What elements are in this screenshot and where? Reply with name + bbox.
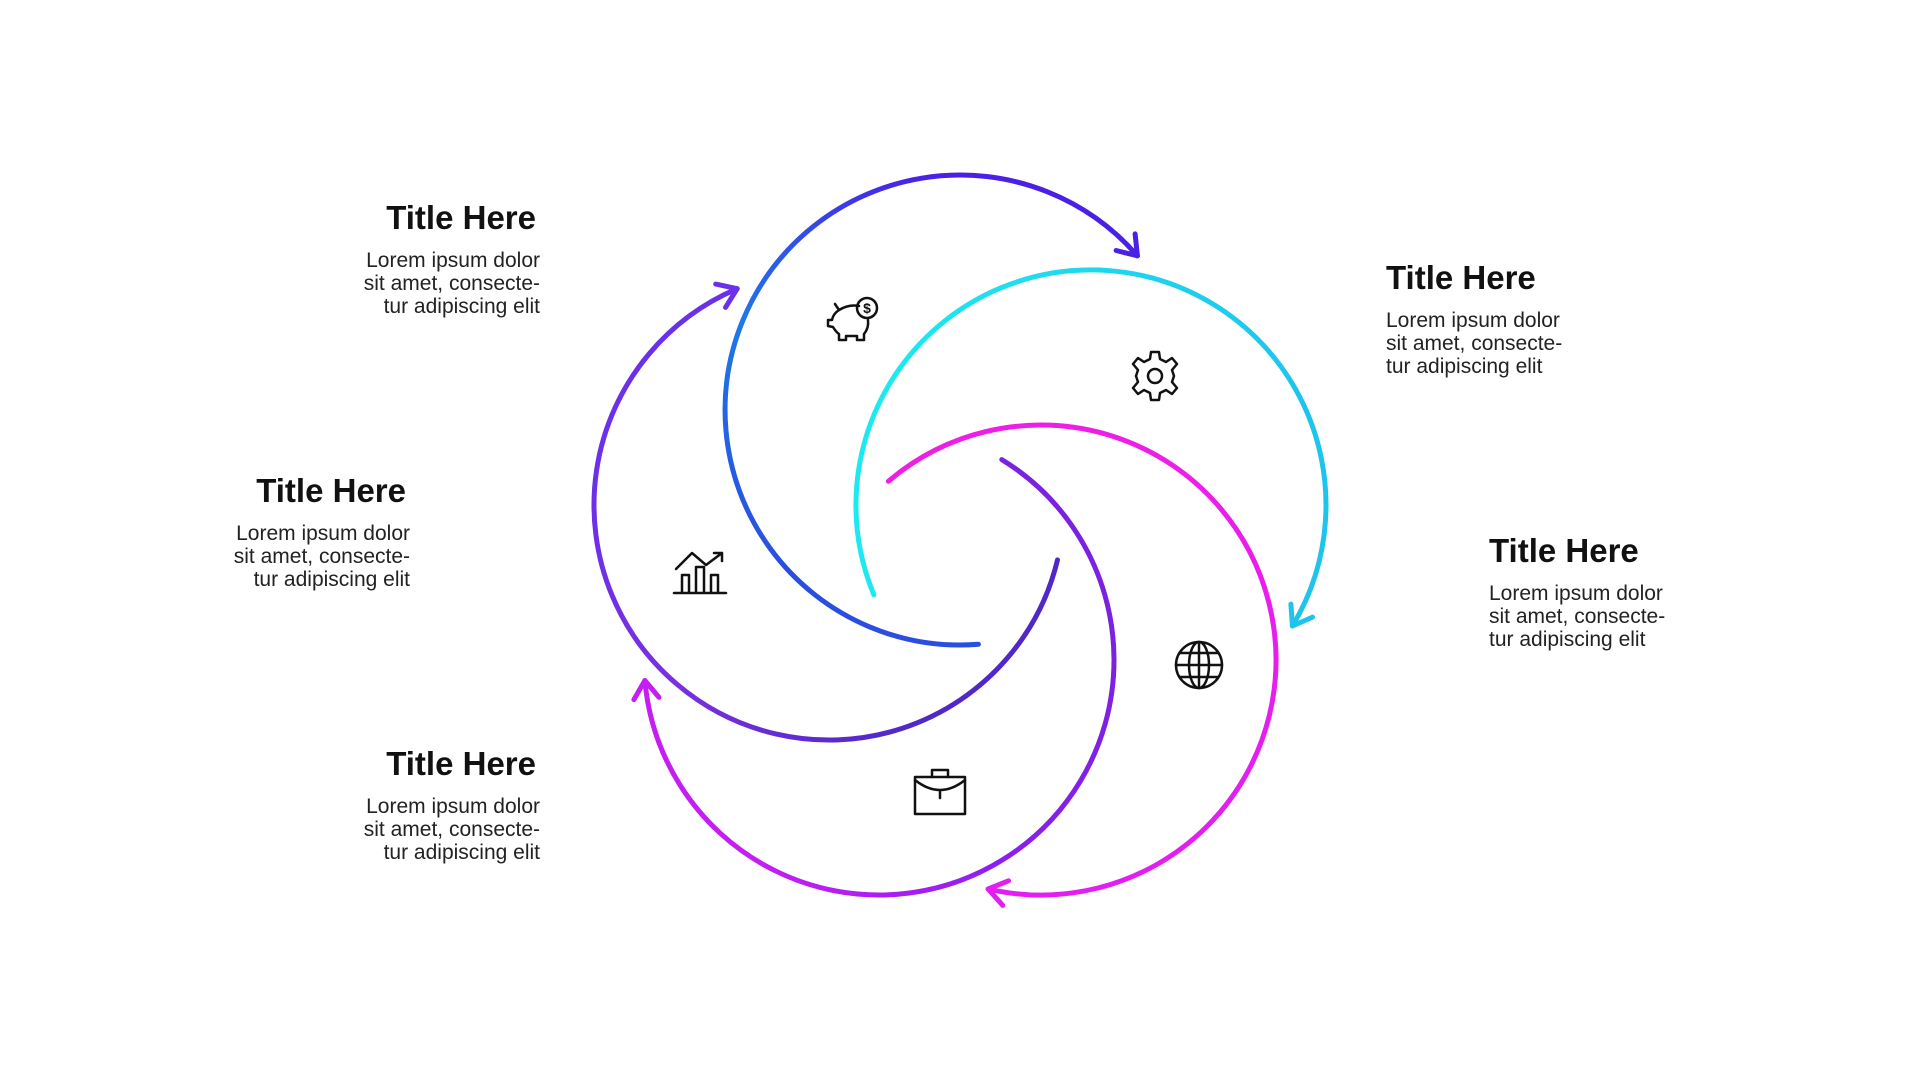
- text: right: Title Here: [1489, 532, 1639, 569]
- text: right: [1489, 532, 1665, 651]
- icon: piggy bank: [828, 298, 877, 340]
- text: right: tur adipiscing elit: [1489, 628, 1645, 651]
- arrow: violet: [594, 284, 1058, 740]
- arrow: pink: [888, 425, 1276, 905]
- text: top left: [364, 199, 540, 318]
- arrow: blue: [725, 175, 1137, 645]
- text: top left: Lorem ipsum dolor: [366, 249, 540, 272]
- text: top right: tur adipiscing elit: [1386, 355, 1542, 378]
- text: top right: [1386, 259, 1562, 378]
- text: top left: Title Here: [386, 199, 536, 236]
- arrow: cyan: [856, 270, 1326, 626]
- icon: chart: [674, 553, 726, 593]
- text: middle left: sit amet, consecte-: [234, 545, 410, 568]
- text: bottom left: tur adipiscing elit: [384, 841, 540, 864]
- text: right: Lorem ipsum dolor: [1489, 582, 1663, 605]
- icon: piggy bank: $: [863, 300, 871, 316]
- icon: globe: [1176, 642, 1222, 688]
- text: top left: tur adipiscing elit: [384, 295, 540, 318]
- text: bottom left: sit amet, consecte-: [364, 818, 540, 841]
- text: top right: Title Here: [1386, 259, 1536, 296]
- text: top right: sit amet, consecte-: [1386, 332, 1562, 355]
- text: bottom left: [364, 745, 540, 864]
- text: top left: sit amet, consecte-: [364, 272, 540, 295]
- arrow: purple: [634, 460, 1114, 895]
- text: middle left: Lorem ipsum dolor: [236, 522, 410, 545]
- text: middle left: tur adipiscing elit: [254, 568, 410, 591]
- text: top right: Lorem ipsum dolor: [1386, 309, 1560, 332]
- icon: briefcase: [915, 770, 965, 814]
- icon: gear: [1133, 352, 1177, 400]
- text: middle left: [234, 472, 410, 591]
- text: bottom left: Lorem ipsum dolor: [366, 795, 540, 818]
- text: bottom left: Title Here: [386, 745, 536, 782]
- text: right: sit amet, consecte-: [1489, 605, 1665, 628]
- text: middle left: Title Here: [256, 472, 406, 509]
